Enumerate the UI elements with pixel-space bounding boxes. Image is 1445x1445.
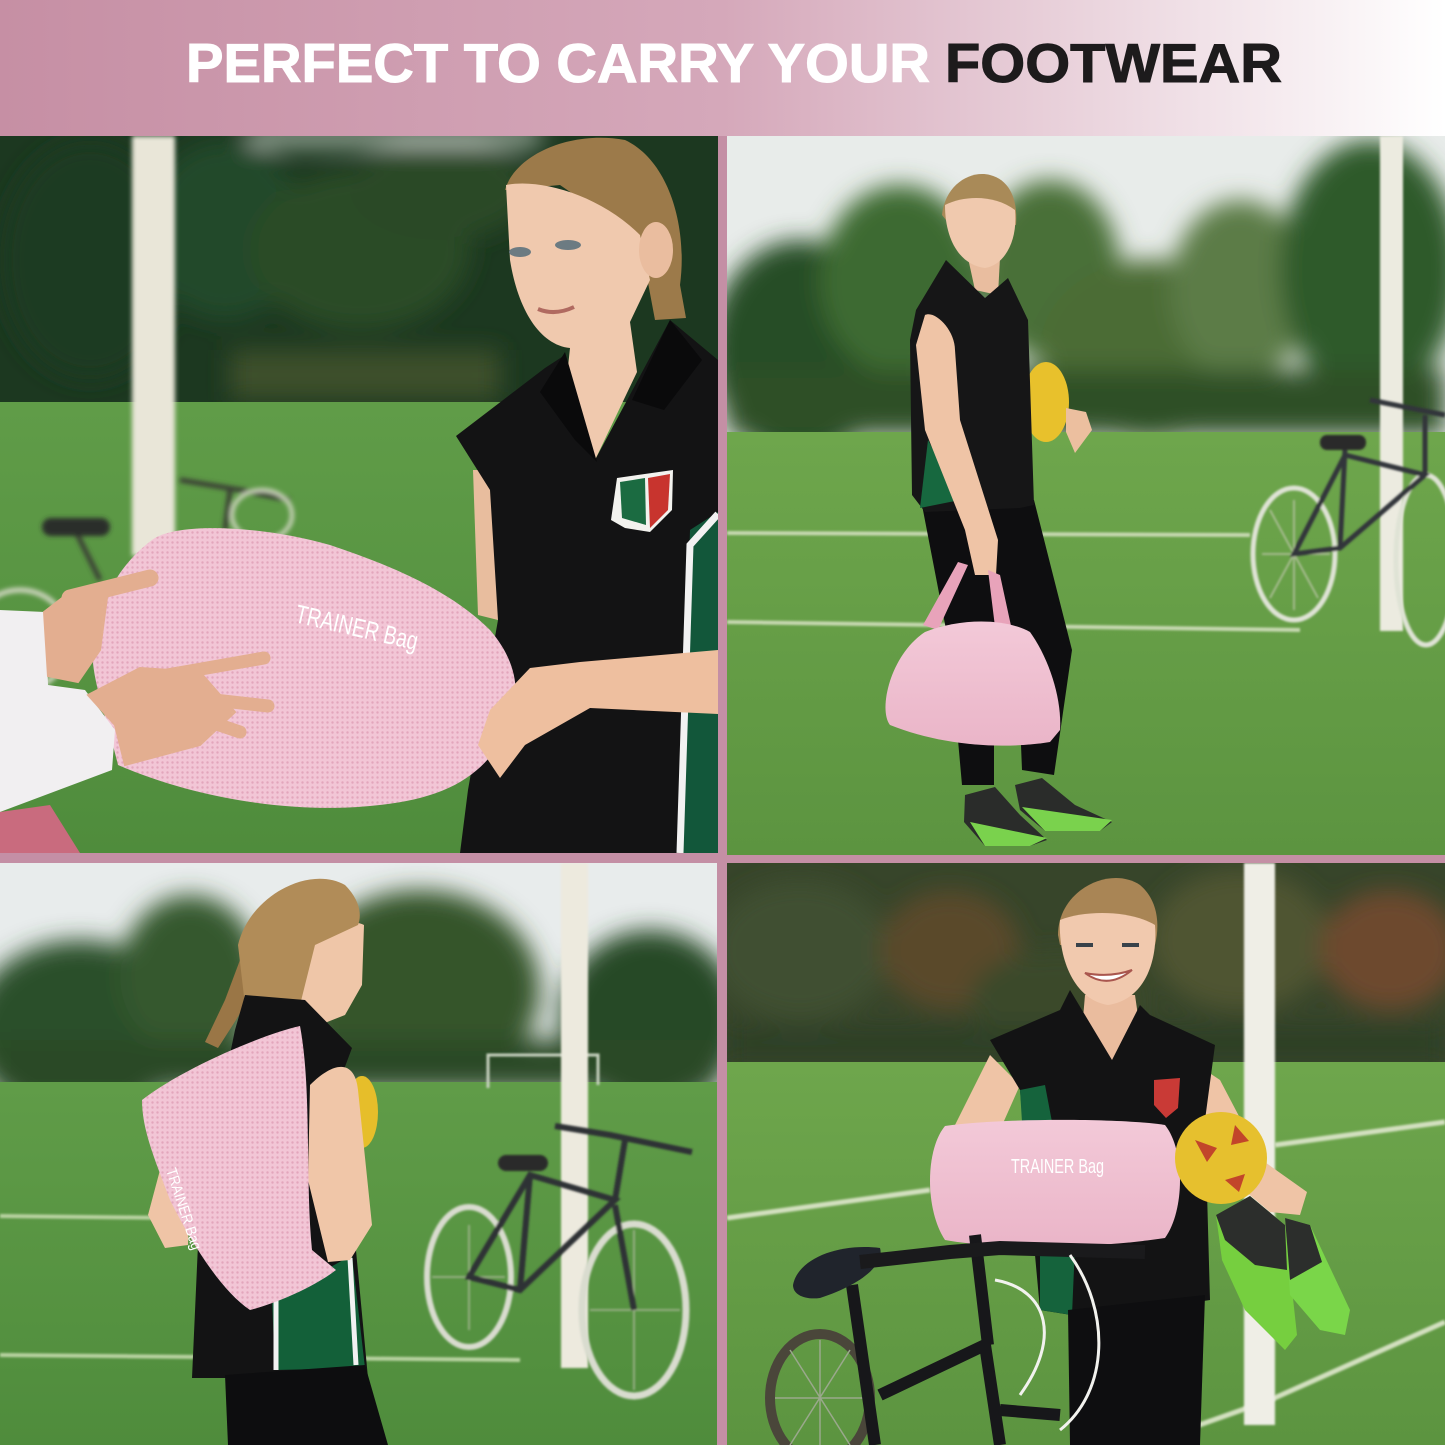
helper sleeve <box>0 610 115 812</box>
girl <box>910 174 1112 846</box>
girl <box>148 879 388 1445</box>
arms <box>955 1055 1307 1215</box>
bicycle <box>770 1235 1145 1445</box>
right arm <box>308 1067 372 1262</box>
leggings <box>922 500 1072 785</box>
goal post <box>132 136 175 556</box>
yellow ball <box>1175 1112 1267 1204</box>
mouth <box>538 307 574 312</box>
face <box>292 922 364 1028</box>
front wheel <box>770 1334 870 1445</box>
pitch line <box>0 1216 520 1360</box>
bicycle <box>427 1126 692 1396</box>
shirt <box>456 320 718 853</box>
school crest <box>611 470 673 532</box>
green panel <box>920 440 954 508</box>
torso <box>192 995 368 1378</box>
pink mesh bag on back <box>142 1026 336 1310</box>
bag logo: TRAINER Bag <box>1011 1156 1104 1178</box>
crest <box>1154 1078 1180 1118</box>
pink bag <box>930 1120 1180 1247</box>
arm <box>473 470 500 620</box>
goal post <box>1380 136 1403 631</box>
yellow ball <box>1030 362 1069 442</box>
face and neck <box>506 183 650 460</box>
pink bag with handles <box>885 562 1060 746</box>
girl <box>955 878 1307 1445</box>
leggings <box>225 1365 388 1445</box>
shirt <box>990 990 1215 1318</box>
face <box>1060 913 1155 1005</box>
bag logo: TRAINER Bag <box>293 599 421 656</box>
hair <box>238 879 360 1005</box>
arm <box>916 314 998 575</box>
football boots <box>1216 1196 1350 1350</box>
green trim <box>1020 1085 1075 1315</box>
saddle <box>793 1247 881 1298</box>
right hand <box>1066 408 1092 453</box>
goal post <box>1244 863 1275 1425</box>
left arm <box>148 1170 190 1248</box>
panel: girl holding bag close-up <box>0 130 718 853</box>
braid <box>205 960 262 1048</box>
collar <box>540 320 702 462</box>
panel: girl wearing bag on back <box>0 863 740 1445</box>
brake cables <box>995 1255 1099 1430</box>
forearm and hand <box>478 650 718 778</box>
background bicycle <box>0 480 292 690</box>
neck <box>968 260 1000 294</box>
shirt <box>910 260 1034 512</box>
frame <box>852 1235 1060 1445</box>
eyes <box>1076 943 1139 947</box>
bag logo: TRAINER Bag <box>162 1166 205 1252</box>
pink mesh bag <box>92 528 516 808</box>
pink item <box>0 805 80 853</box>
smile <box>1085 970 1132 981</box>
helper hands <box>44 578 268 765</box>
neck <box>1082 995 1140 1065</box>
title white part: PERFECT TO CARRY YOUR <box>186 32 930 94</box>
yellow ball <box>346 1076 378 1148</box>
pitch lines <box>727 1122 1445 1430</box>
girl <box>456 138 718 853</box>
header banner <box>0 0 1445 136</box>
eye <box>509 247 531 257</box>
face <box>945 198 1015 268</box>
handlebar <box>860 1248 1145 1262</box>
panel: girl carrying bag by handles <box>710 136 1445 855</box>
boots <box>964 787 1047 846</box>
pitch line <box>727 533 1300 630</box>
title dark part: FOOTWEAR <box>945 32 1282 94</box>
bicycle <box>1253 400 1445 645</box>
hair <box>1058 878 1157 945</box>
hair <box>505 138 686 320</box>
side panel <box>680 512 718 853</box>
green panel <box>272 1255 365 1370</box>
panel: girl with bag, bike, ball and boots <box>710 863 1445 1445</box>
distant goal <box>488 1055 598 1088</box>
ear <box>639 222 673 278</box>
hair <box>942 174 1016 225</box>
spokes <box>775 1340 868 1445</box>
goal post <box>561 863 588 1368</box>
leggings <box>1068 1295 1205 1445</box>
